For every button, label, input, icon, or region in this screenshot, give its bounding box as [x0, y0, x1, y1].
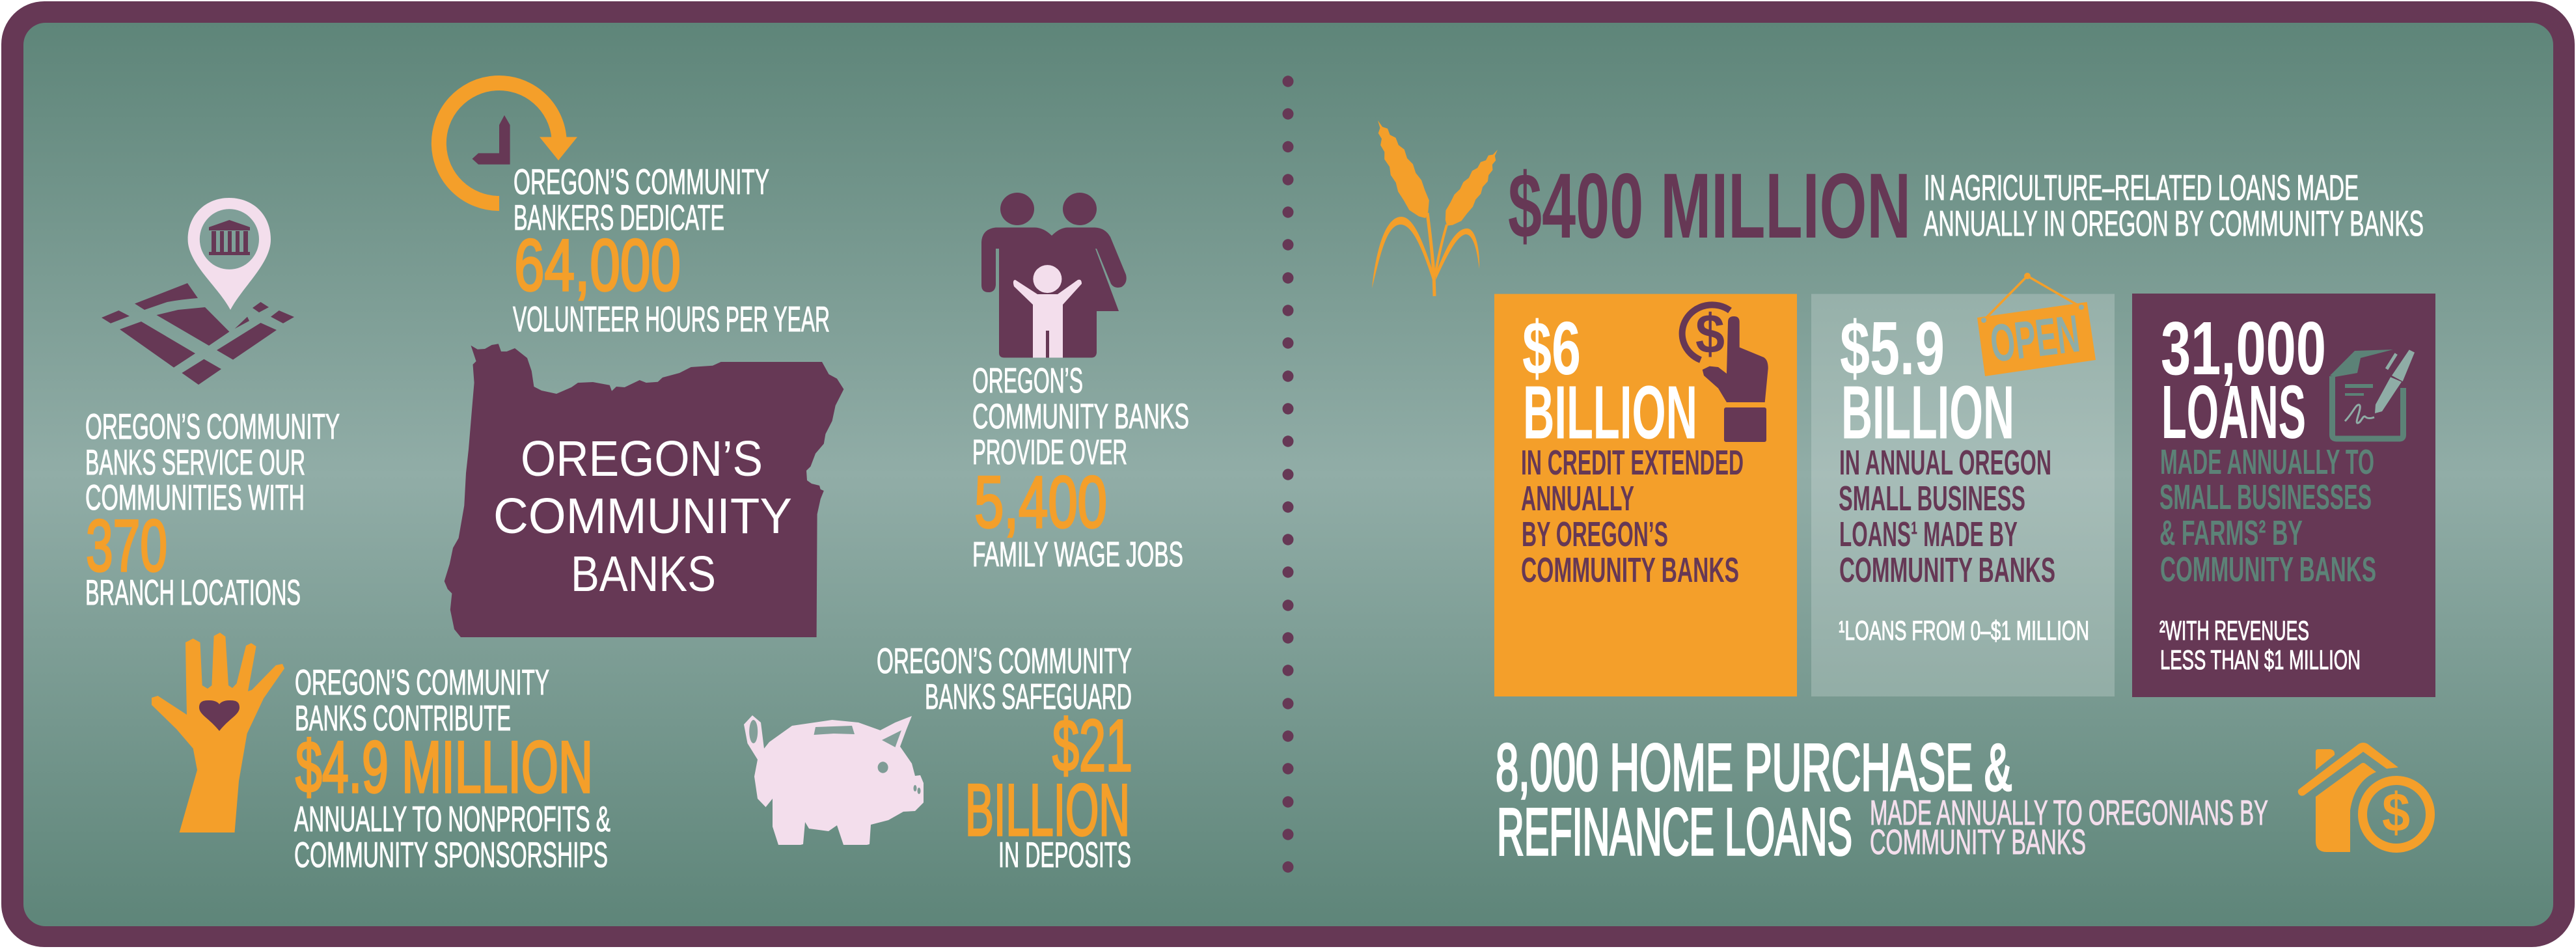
icon: piggy bank [744, 715, 924, 845]
description [1839, 443, 2055, 590]
text block: family wage jobs [972, 361, 1189, 574]
stat: 31,000 loans [2161, 306, 2326, 454]
icon: hand holding coin [1682, 303, 1768, 442]
text block: home loans: REFINANCE LOANS [1497, 795, 1852, 869]
description: LOANS¹ MADE BY [1839, 515, 2018, 554]
stat: $6 billion [1522, 306, 1697, 455]
text block: nonprofit contributions [294, 662, 610, 875]
text block: home loans: 8,000 HOME PURCHASE & [1496, 730, 2012, 805]
text block: deposits: IN DEPOSITS [998, 834, 1131, 875]
icon: wheat [1366, 115, 1507, 296]
description: SMALL BUSINESSES [2159, 478, 2372, 517]
stat: 31,000 loans: 31,000 [2161, 306, 2326, 391]
icon: signed document with pen [2330, 350, 2415, 439]
text block: volunteer hours: VOLUNTEER HOURS PER YEAR [513, 299, 830, 339]
text block: branch locations: 370 [86, 505, 167, 586]
description [1521, 443, 1744, 590]
text block: deposits: BANKS SAFEGUARD [925, 676, 1132, 717]
icon: house with coin: $ [2382, 782, 2410, 843]
footnote [2159, 615, 2361, 675]
text block: branch locations: BRANCH LOCATIONS [85, 572, 301, 612]
text block: nonprofit contributions: COMMUNITY SPONSORSHIPS [294, 834, 608, 875]
panel: 31,000 loans [2132, 294, 2435, 697]
title [493, 431, 792, 602]
text block: family wage jobs: OREGON’S [972, 361, 1083, 400]
description: COMMUNITY BANKS [1839, 551, 2055, 590]
title: BANKS [571, 546, 716, 602]
icon: open sign: OPEN [1987, 305, 2083, 374]
panel: $6 billion credit [1494, 294, 1797, 696]
text block: home loans [1496, 730, 2268, 869]
panel: $5.9 billion small business loans [1811, 273, 2115, 696]
text block: nonprofit contributions: OREGON’S COMMUNITY [295, 662, 549, 702]
icon: open sign [1977, 273, 2096, 376]
title: COMMUNITY [493, 488, 792, 544]
heading: $400 million agriculture loans: $400 MILLION [1508, 154, 1911, 258]
description: COMMUNITY BANKS [1521, 551, 1739, 590]
icon: house with coin [2298, 743, 2430, 852]
text block: deposits: $21 [1052, 705, 1132, 786]
map of Oregon with title [445, 344, 843, 637]
icon: map with location pin [102, 198, 294, 385]
icon: clock with circular arrow [439, 83, 577, 204]
description: ANNUALLY [1521, 479, 1634, 518]
stat: $6 billion: $6 [1522, 306, 1581, 391]
stat: $5.9 billion [1840, 306, 2014, 455]
text block: home loans: COMMUNITY BANKS [1870, 823, 2086, 862]
text block: volunteer hours: 64,000 [514, 225, 681, 306]
description: & FARMS² BY [2159, 514, 2303, 553]
dotted divider [1282, 76, 1294, 873]
text block: volunteer hours [513, 161, 830, 339]
footnote: ²WITH REVENUES [2159, 615, 2309, 646]
text block: deposits: BILLION [965, 769, 1130, 851]
text block: volunteer hours: BANKERS DEDICATE [514, 197, 724, 238]
text block: branch locations: OREGON’S COMMUNITY [85, 406, 340, 447]
heading: $400 million agriculture loans [1508, 154, 2424, 258]
title: OREGON’S [521, 431, 763, 487]
text block: family wage jobs: COMMUNITY BANKS [972, 397, 1189, 436]
text block: home loans: MADE ANNUALLY TO OREGONIANS BY [1870, 793, 2268, 832]
stat: $6 billion: BILLION [1523, 370, 1697, 455]
text block: branch locations: COMMUNITIES WITH [85, 477, 305, 517]
text block: family wage jobs: FAMILY WAGE JOBS [972, 535, 1183, 574]
text block: nonprofit contributions: BANKS CONTRIBUTE [295, 698, 511, 738]
footnote: ¹LOANS FROM 0–$1 MILLION [1839, 615, 2089, 646]
stat: $5.9 billion: $5.9 [1840, 306, 1945, 391]
text block: nonprofit contributions: ANNUALLY TO NONPROFITS & [294, 799, 610, 839]
footnote: LESS THAN $1 MILLION [2160, 644, 2361, 675]
description: SMALL BUSINESS [1839, 479, 2025, 518]
text block: deposits [877, 640, 1132, 875]
description: IN ANNUAL OREGON [1839, 443, 2051, 482]
description: COMMUNITY BANKS [2160, 550, 2376, 589]
description: BY OREGON’S [1522, 515, 1668, 554]
text block: volunteer hours: OREGON’S COMMUNITY [514, 161, 769, 202]
text block: branch locations: BANKS SERVICE OUR [85, 442, 305, 482]
text block: deposits: OREGON’S COMMUNITY [877, 640, 1132, 681]
icon: family [981, 193, 1127, 358]
icon: hand holding coin: $ [1695, 303, 1725, 365]
text block: family wage jobs: PROVIDE OVER [972, 433, 1127, 472]
icon: hand with heart [152, 633, 284, 832]
stat: 31,000 loans: LOANS [2161, 370, 2306, 454]
description: IN CREDIT EXTENDED [1521, 443, 1744, 482]
text block: branch locations [85, 406, 340, 612]
stat: $5.9 billion: BILLION [1841, 370, 2014, 455]
text block: nonprofit contributions: $4.9 MILLION [295, 726, 593, 808]
description: MADE ANNUALLY TO [2160, 443, 2374, 482]
text block: family wage jobs: 5,400 [974, 461, 1107, 543]
description [2159, 443, 2376, 589]
